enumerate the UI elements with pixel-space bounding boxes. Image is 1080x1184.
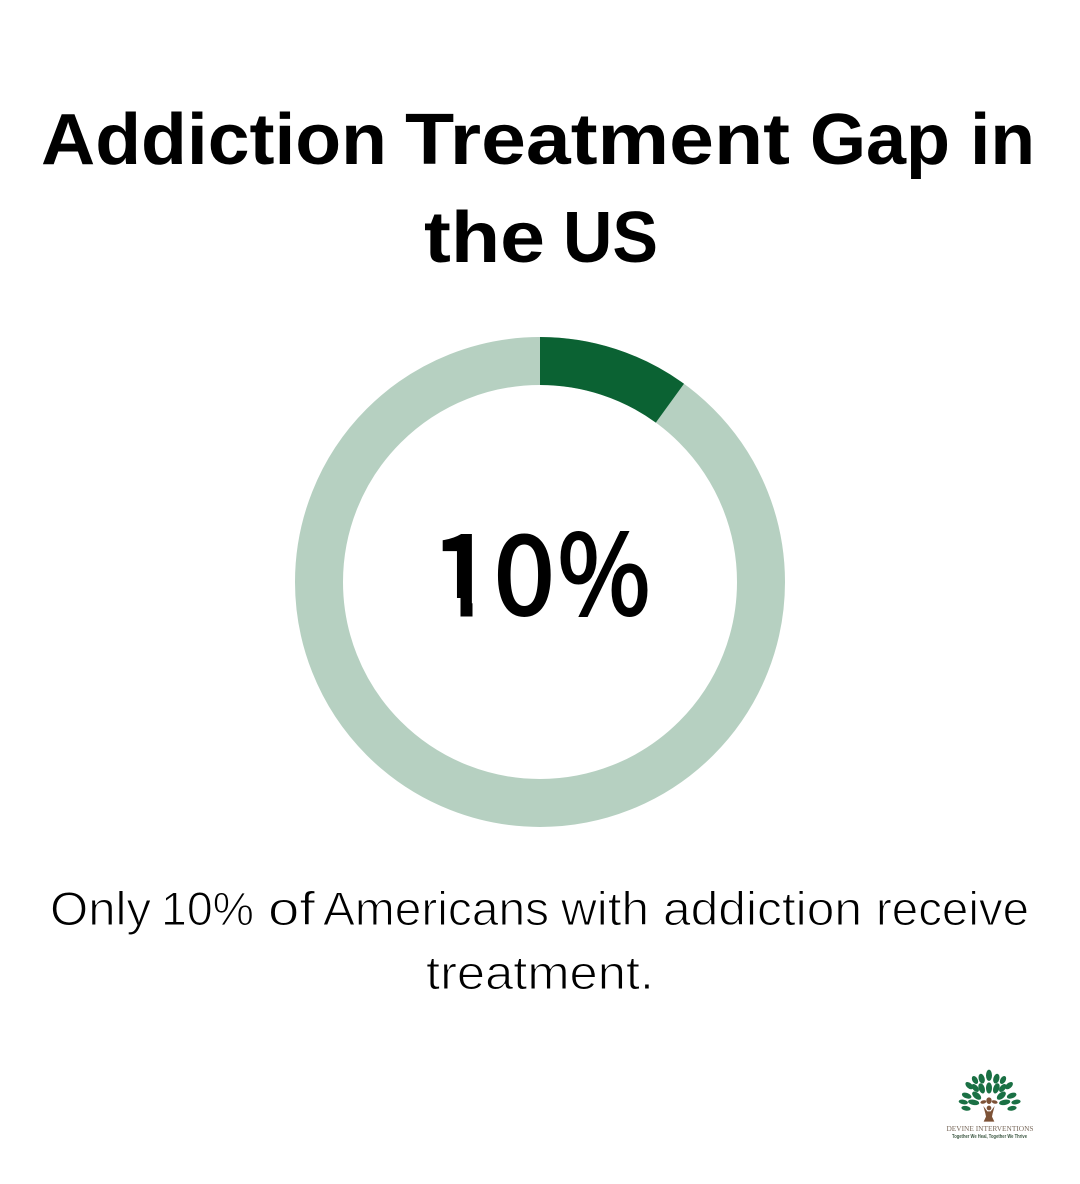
title: in	[970, 100, 1035, 180]
center value: 10%: 1	[432, 489, 492, 646]
donut track: remaining 90%	[319, 361, 761, 803]
title: Gap	[810, 100, 950, 180]
title: Treatment	[405, 100, 790, 180]
title: the	[424, 198, 545, 278]
center value: 10%: %	[558, 489, 650, 646]
infographic canvas	[42, 112, 1033, 1139]
donut chart	[319, 337, 761, 803]
logo name: DEVINE INTERVENTIONS	[946, 1125, 1034, 1133]
caption: of	[268, 882, 316, 935]
caption: receive	[876, 882, 1029, 935]
center value: 10%: 0	[494, 489, 554, 646]
logo tagline: Together We Heal, Together We Thrive	[952, 1134, 1027, 1140]
title: US	[563, 198, 658, 278]
center value: 10%	[442, 531, 648, 617]
caption: with	[560, 882, 649, 935]
donut segment: 10%	[540, 337, 684, 423]
caption: Americans	[323, 882, 549, 935]
icon: tree with leaves	[958, 1070, 1021, 1122]
caption: treatment.	[426, 946, 654, 999]
caption: Only	[50, 882, 152, 935]
title: Addiction	[41, 100, 387, 180]
logo: Devine Interventions	[946, 1070, 1034, 1140]
caption: 10%	[161, 882, 254, 935]
caption: addiction	[663, 882, 862, 935]
caption	[50, 882, 1029, 999]
title	[41, 100, 1035, 278]
